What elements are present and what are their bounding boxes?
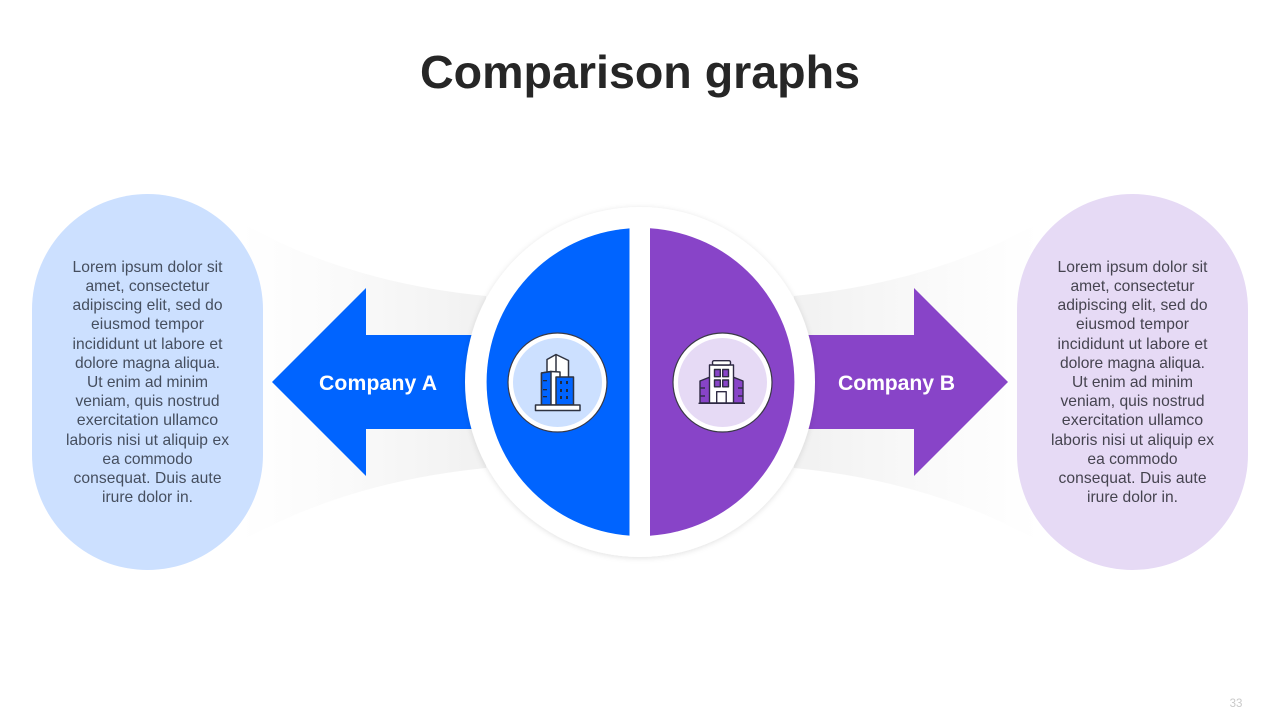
text block: company B description: Lorem ipsum dolor sit: [1058, 259, 1208, 276]
panel: company B description: [1017, 194, 1248, 570]
text block: company B description: laboris nisi ut aliquip ex: [1051, 432, 1214, 449]
text block: company A description: Ut enim ad minim: [87, 374, 208, 391]
text block: company B description: irure dolor in.: [1087, 489, 1178, 506]
text block: company A description: ea commodo: [102, 451, 193, 468]
text block: company A description: laboris nisi ut aliquip ex: [66, 432, 229, 449]
arrow: Company A: Company A: [319, 372, 437, 395]
text block: company A description: exercitation ullamco: [77, 412, 218, 429]
text block: company A description: dolore magna aliqua.: [75, 355, 220, 372]
text block: company B description: ea commodo: [1087, 451, 1178, 468]
left half disc: [487, 228, 630, 536]
text block: company A description: [66, 259, 229, 506]
page number: 33: [1230, 698, 1242, 710]
icon: company A building: [508, 333, 607, 432]
text block: company A description: veniam, quis nostrud: [76, 393, 220, 410]
central white disc: [465, 207, 815, 557]
text block: company B description: consequat. Duis aute: [1058, 470, 1206, 487]
text block: company A description: eiusmod tempor: [91, 316, 204, 333]
arrow: Company A: [272, 288, 480, 476]
text block: company B description: [1051, 259, 1214, 506]
text block: company B description: incididunt ut labore et: [1058, 336, 1208, 353]
icon: company B building: [673, 333, 772, 432]
text block: company A description: incididunt ut labore et: [72, 336, 223, 353]
text block: company B description: eiusmod tempor: [1076, 316, 1189, 333]
arrow: Company B: Company B: [838, 372, 955, 395]
arrow: Company B: [800, 288, 1008, 476]
text block: company B description: Ut enim ad minim: [1072, 374, 1193, 391]
panel: company A description: [32, 194, 263, 570]
text block: company A description: amet, consectetur: [86, 278, 210, 295]
text block: company A description: adipiscing elit, sed do: [72, 297, 223, 314]
right half disc: [650, 228, 794, 536]
title: Comparison graphs: [420, 46, 860, 98]
text block: company A description: Lorem ipsum dolor sit: [72, 259, 223, 276]
text block: company B description: adipiscing elit, sed do: [1058, 297, 1208, 314]
left funnel band: [240, 222, 486, 542]
text block: company B description: exercitation ullamco: [1062, 412, 1203, 429]
text block: company B description: veniam, quis nostrud: [1060, 393, 1204, 410]
text block: company B description: dolore magna aliqua.: [1060, 355, 1205, 372]
right funnel band: [794, 222, 1040, 542]
text block: company A description: irure dolor in.: [102, 489, 193, 506]
text block: company A description: consequat. Duis aute: [74, 470, 222, 487]
text block: company B description: amet, consectetur: [1070, 278, 1194, 295]
